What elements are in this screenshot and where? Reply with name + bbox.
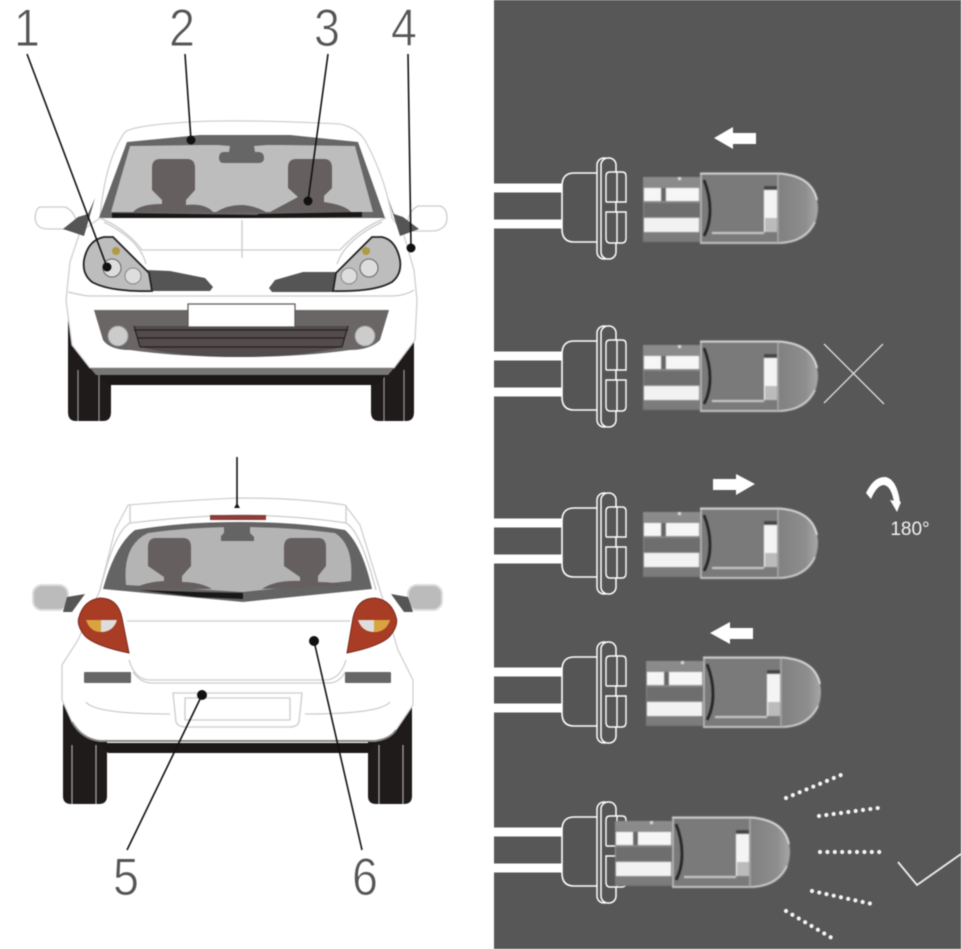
rear view of car bbox=[33, 498, 442, 804]
front bumper air intake bbox=[94, 310, 389, 357]
light rays bbox=[786, 775, 880, 941]
front wheels bbox=[68, 320, 414, 421]
rear mirrors bbox=[33, 585, 442, 612]
rear wiper bbox=[139, 590, 243, 599]
hood lines bbox=[100, 218, 386, 264]
rear wheels bbox=[63, 700, 412, 804]
rear license plate recess bbox=[173, 693, 302, 727]
left headlight bbox=[84, 237, 213, 291]
number 3: 3 bbox=[314, 0, 340, 58]
front view of car bbox=[35, 121, 447, 421]
arrow: left, step 1 bbox=[714, 127, 756, 149]
rear reflectors bbox=[84, 672, 391, 683]
right headlight bbox=[269, 237, 400, 292]
front body bbox=[66, 121, 417, 368]
step 2: bulb wrong orientation bbox=[494, 326, 818, 427]
cross mark bbox=[824, 344, 884, 404]
rotate 180 degrees icon bbox=[866, 477, 930, 540]
callout leader lines bbox=[27, 54, 416, 850]
side mirrors bbox=[35, 198, 447, 236]
right tail light bbox=[347, 598, 397, 653]
rear high-mounted brake light bbox=[210, 515, 266, 520]
number 6: 6 bbox=[352, 847, 378, 907]
rear body bbox=[62, 498, 413, 741]
seats and occupants bbox=[133, 159, 213, 212]
windshield bbox=[99, 135, 385, 218]
number 1: 1 bbox=[14, 0, 40, 58]
step 4: bulb inserted again bbox=[494, 642, 821, 743]
left tail light bbox=[78, 598, 129, 653]
number 2: 2 bbox=[169, 0, 195, 58]
rotate 180 degrees icon: 180° bbox=[890, 519, 930, 540]
number 4: 4 bbox=[391, 0, 417, 58]
step 1: bulb pulled out, connector bbox=[494, 158, 818, 259]
step 5: bulb fully seated and lit bbox=[494, 802, 790, 903]
front license plate bbox=[188, 304, 295, 327]
arrow: right, step 3 bbox=[713, 474, 755, 495]
rear seats bbox=[133, 538, 212, 589]
background panel: installation instructions bbox=[494, 0, 961, 949]
check mark bbox=[898, 854, 961, 885]
rear window bbox=[103, 522, 372, 602]
arrow: left, step 4 bbox=[710, 622, 753, 644]
step 3: bulb rotated bbox=[494, 493, 818, 594]
number 5: 5 bbox=[113, 847, 139, 907]
